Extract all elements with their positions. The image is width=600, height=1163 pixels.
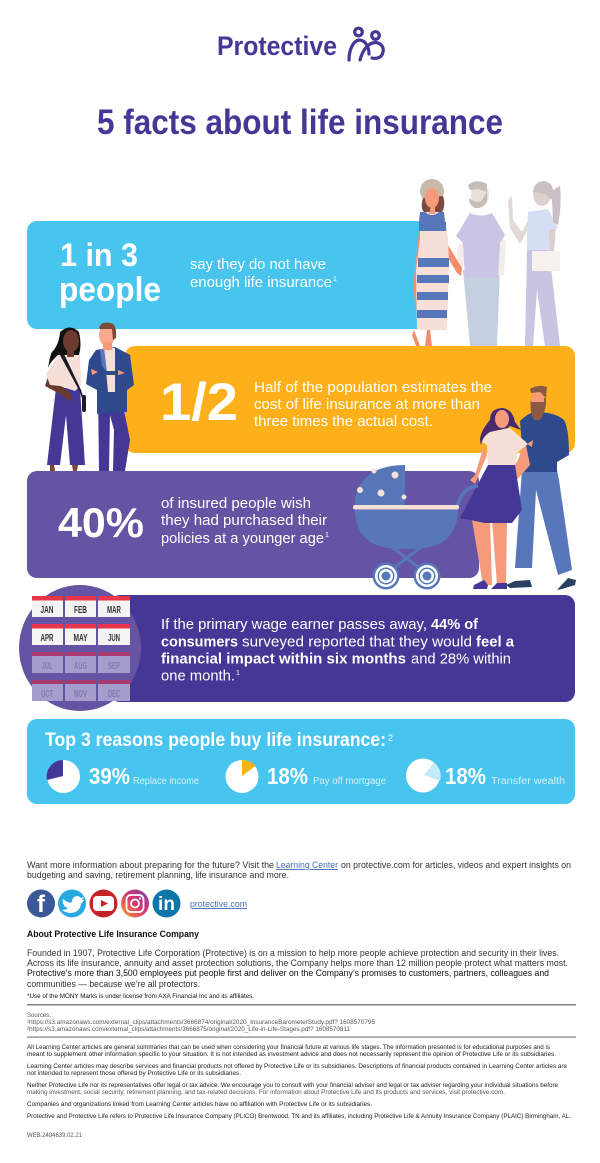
text: more information: Learning Center xyxy=(276,860,338,871)
panel: primary wage earner: financial impact within six months xyxy=(161,650,406,668)
pie: pay off mortgage: Pay off mortgage xyxy=(313,776,386,787)
link: protective.com: protective.com xyxy=(190,899,247,910)
month row 3: AUG xyxy=(74,661,87,672)
panel: 1 in 3 people: 1 xyxy=(333,276,337,283)
panel: primary wage earner xyxy=(110,595,575,702)
panel: one half estimate xyxy=(125,346,575,453)
month row 1: JAN xyxy=(40,605,54,616)
pie: pay off mortgage: 18% xyxy=(267,763,308,789)
panel: 40 percent: of insured people wish xyxy=(161,495,311,512)
text: web code: WEB.2484639.02.21 xyxy=(27,1132,82,1139)
panel: one half estimate: cost of life insurance at more than xyxy=(254,396,480,413)
text: sources: ²https://s3.amazonaws.com/external_clips/attachments/3666875/original/2020_Life-in-Life-Stages.pdf? 1608570811 xyxy=(27,1027,351,1033)
text: disclaimers: meant to supplement other information specific to your situation. It is not intended as investment advice and does not necessarily represent the opinion of Protective Life or its subsidiaries. xyxy=(27,1051,556,1058)
text: about paragraph: Across its life insurance, annuity and asset protection solutions, the Company helps more than 12 million people protect what matters most. xyxy=(27,958,568,969)
woman xyxy=(45,328,86,471)
panel: top 3 reasons: 2 xyxy=(388,733,393,743)
heading: about: About Protective Life Insurance Company xyxy=(27,929,199,939)
pie: transfer wealth: Transfer wealth xyxy=(491,776,565,787)
text: disclaimers: All Learning Center articles are general summaries that can be used when considering your financial future at various life stages. The information presented is for educational purposes and is xyxy=(27,1044,551,1051)
text: more information xyxy=(27,860,571,881)
social icons xyxy=(27,890,180,918)
faded woman xyxy=(508,181,561,346)
panel: top 3 reasons xyxy=(27,719,575,804)
stroller xyxy=(353,465,478,590)
text: disclaimers: not intended to represent those offered by Protective Life or its subsidiaries. xyxy=(27,1070,241,1077)
man xyxy=(86,323,134,471)
panel: top 3 reasons: Top 3 reasons people buy life insurance: xyxy=(45,730,386,751)
panel: primary wage earner: surveyed reported that they would xyxy=(242,634,472,650)
pie: transfer wealth: 18% xyxy=(445,763,486,789)
panel: primary wage earner: one month. xyxy=(161,668,235,684)
panel: 1 in 3 people: say they do not have xyxy=(190,256,326,273)
panel: 1 in 3 people xyxy=(27,221,427,329)
text: more information: Want more information about preparing for the future? Visit the xyxy=(27,860,274,871)
illustration: couple with stroller xyxy=(353,386,576,590)
icon: linkedin xyxy=(152,890,180,918)
month row 4 xyxy=(32,680,130,701)
panel: primary wage earner: and 28% within xyxy=(411,650,511,668)
text: sources xyxy=(27,1013,376,1033)
text: more information: budgeting and saving, retirement planning, life insurance and more. xyxy=(27,870,289,881)
text: disclaimers: Neither Protective Life nor its representatives offer legal or tax advice. We encourage you to consult with your financial adviser and legal or tax adviser regarding your individual situations before xyxy=(27,1082,558,1089)
illustration: two people at left xyxy=(45,323,134,471)
panel: 40 percent: 1 xyxy=(325,532,329,539)
logo: Protective: Protective xyxy=(217,31,337,61)
text: sources: ¹https://s3.amazonaws.com/external_clips/attachments/3666874/original/2020_InsuranceBarometerStudy.pdf? 1608570795 xyxy=(27,1020,376,1026)
pie: replace income: 39% xyxy=(89,763,130,789)
text: disclaimers: making investment, social security, retirement planning, and tax-related decisions. For information about Protective Life and its products and services, visit protective.com. xyxy=(27,1089,505,1096)
calendar illustration xyxy=(19,585,141,711)
text: disclaimers xyxy=(27,1044,571,1120)
panel: 40 percent: they had purchased their xyxy=(161,512,327,529)
text: about paragraph: Protective’s more than 3,500 employees put people first and deliver on the Company’s promises to customers, partners, colleagues and xyxy=(27,968,549,979)
text: more information: on protective.com for articles, videos and expert insights on xyxy=(341,860,571,871)
panel: 40 percent xyxy=(27,471,479,578)
panel: primary wage earner: consumers xyxy=(161,634,238,650)
icon: linkedin: in xyxy=(158,894,175,915)
month row 3: SEP xyxy=(108,661,120,672)
woman xyxy=(460,408,533,589)
icon: youtube xyxy=(90,890,118,918)
month row 2: MAY xyxy=(74,633,88,644)
icon: facebook xyxy=(27,890,55,918)
title: 5 facts about life insurance xyxy=(97,103,503,142)
month row 1 xyxy=(32,596,130,617)
month row 4: OCT xyxy=(41,689,53,700)
panel: one half estimate: 1/2 xyxy=(160,373,238,432)
panel: primary wage earner: 44% of xyxy=(431,616,479,633)
month row 2: APR xyxy=(40,633,54,644)
text: MONY notice: *Use of the MONY Marks is under license from AXA Financial Inc and its affiliates. xyxy=(27,993,254,1000)
panel: one half estimate: Half of the population estimates the xyxy=(254,379,492,396)
text: sources: Sources: xyxy=(27,1013,51,1019)
icon: twitter xyxy=(58,890,86,918)
text: about paragraph xyxy=(27,948,568,990)
pie: replace income: Replace income xyxy=(133,776,199,787)
illustration: three standing people xyxy=(412,179,561,346)
month row 1: FEB xyxy=(74,605,87,616)
text: disclaimers: Protective and Protective Life refers to Protective Life Insurance Company (PLICO) Brentwood, TN and its affiliates, including Protective Life & Annuity Insurance Company (PLAIC) Birmingham, AL. xyxy=(27,1113,571,1120)
text: disclaimers: Learning Center articles may describe services and financial products not offered by Protective Life or its subsidiaries. Descriptions of financial products contained in Learning Center articles are xyxy=(27,1063,567,1070)
panel: 1 in 3 people: 1 in 3 xyxy=(60,237,138,273)
panel: 40 percent: policies at a younger age xyxy=(161,530,324,547)
faded man xyxy=(456,181,506,346)
month row 4: NOV xyxy=(74,689,87,700)
text: about paragraph: Founded in 1907, Protective Life Corporation (Protective) is on a mission to help more people achieve protection and security in their lives. xyxy=(27,948,559,959)
panel: primary wage earner: If the primary wage earner passes away, xyxy=(161,616,427,633)
pie: transfer wealth xyxy=(406,758,565,792)
panel: 40 percent: 40% xyxy=(58,499,144,546)
icon: instagram xyxy=(121,890,149,918)
text: about paragraph: communities — because we’re all protectors. xyxy=(27,979,200,990)
month row 2: JUN xyxy=(108,633,120,644)
pie: pay off mortgage xyxy=(226,760,386,793)
month row 3: JUL xyxy=(42,661,52,672)
month row 1: MAR xyxy=(107,605,121,616)
panel: 1 in 3 people: people xyxy=(59,271,161,309)
panel: primary wage earner: feel a xyxy=(476,634,515,650)
panel: 1 in 3 people: enough life insurance xyxy=(190,274,332,291)
text: disclaimers: Companies and organizations linked from Learning Center articles have no affiliation with Protective Life or its subsidiaries. xyxy=(27,1101,372,1108)
icon: facebook: f xyxy=(37,891,46,918)
pie: replace income xyxy=(47,760,199,793)
man xyxy=(506,386,576,590)
month row 2 xyxy=(32,624,130,645)
panel: one half estimate: three times the actual cost. xyxy=(254,413,433,430)
striped dress woman xyxy=(412,179,462,346)
panel: primary wage earner: 1 xyxy=(236,670,240,677)
month row 4: DEC xyxy=(108,689,120,700)
month row 3 xyxy=(32,652,130,673)
